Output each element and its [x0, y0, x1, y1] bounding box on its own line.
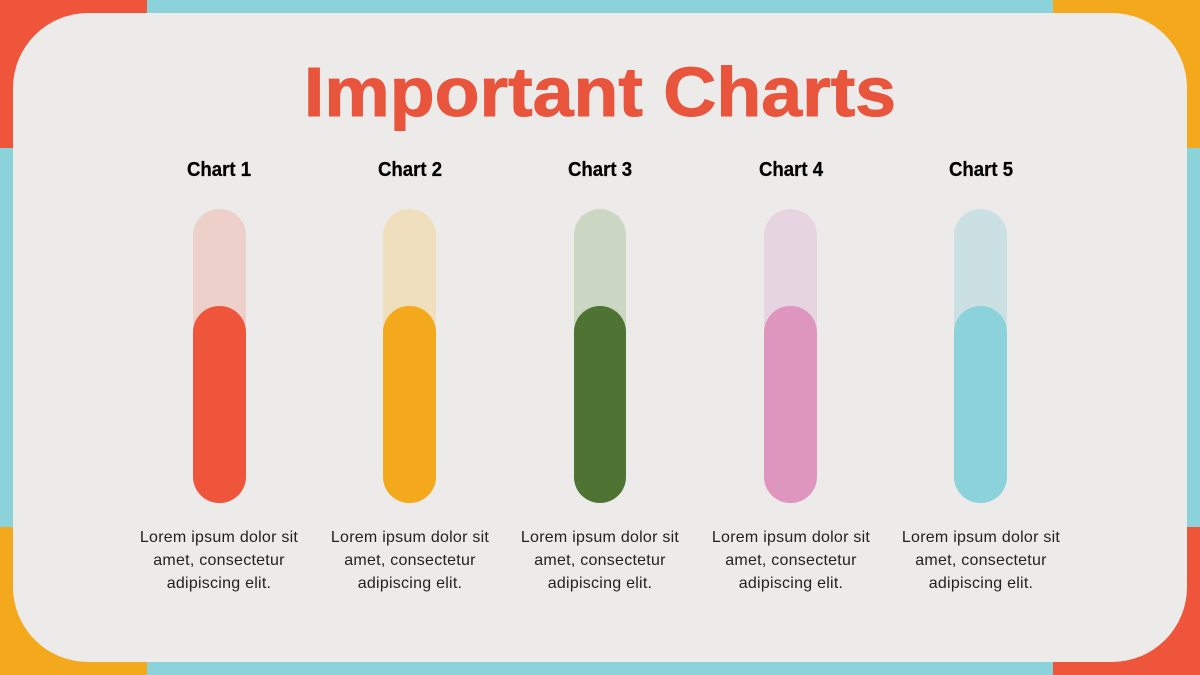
- text: chart 1 description: [140, 529, 298, 592]
- corner: bottom left orange: [0, 527, 147, 675]
- corner: top left red: [0, 0, 147, 148]
- text: chart 1 description: adipiscing elit.: [167, 575, 271, 592]
- heading: chart 4: Chart 4: [759, 159, 823, 181]
- text: chart 4 description: [712, 529, 870, 592]
- text: chart 3 description: [521, 529, 679, 592]
- heading: chart 1: Chart 1: [187, 159, 251, 181]
- text: chart 3 description: adipiscing elit.: [548, 575, 652, 592]
- chart 5 bar: [954, 209, 1007, 503]
- text: chart 1 description: amet, consectetur: [153, 552, 285, 569]
- text: chart 4 description: amet, consectetur: [725, 552, 857, 569]
- text: chart 5 description: [902, 529, 1060, 592]
- text: chart 3 description: amet, consectetur: [534, 552, 666, 569]
- text: chart 5 description: amet, consectetur: [915, 552, 1047, 569]
- heading: chart 5: Chart 5: [949, 159, 1013, 181]
- heading: chart 3: Chart 3: [568, 159, 632, 181]
- chart 3 bar: [574, 209, 626, 503]
- text: chart 5 description: Lorem ipsum dolor sit: [902, 529, 1060, 546]
- text: chart 2 description: amet, consectetur: [344, 552, 476, 569]
- text: chart 2 description: Lorem ipsum dolor sit: [331, 529, 489, 546]
- text: chart 4 description: adipiscing elit.: [739, 575, 843, 592]
- text: chart 2 description: [331, 529, 489, 592]
- corner: top right orange: [1053, 0, 1200, 148]
- heading: chart 2: Chart 2: [378, 159, 442, 181]
- chart 4 bar: [764, 209, 817, 503]
- text: chart 2 description: adipiscing elit.: [358, 575, 462, 592]
- text: chart 4 description: Lorem ipsum dolor sit: [712, 529, 870, 546]
- chart 1 bar: [193, 209, 246, 503]
- text: chart 1 description: Lorem ipsum dolor sit: [140, 529, 298, 546]
- chart 2 bar: [383, 209, 436, 503]
- text: chart 3 description: Lorem ipsum dolor sit: [521, 529, 679, 546]
- text: chart 5 description: adipiscing elit.: [929, 575, 1033, 592]
- title: Important Charts: [304, 53, 896, 131]
- corner: bottom right red: [1053, 527, 1200, 675]
